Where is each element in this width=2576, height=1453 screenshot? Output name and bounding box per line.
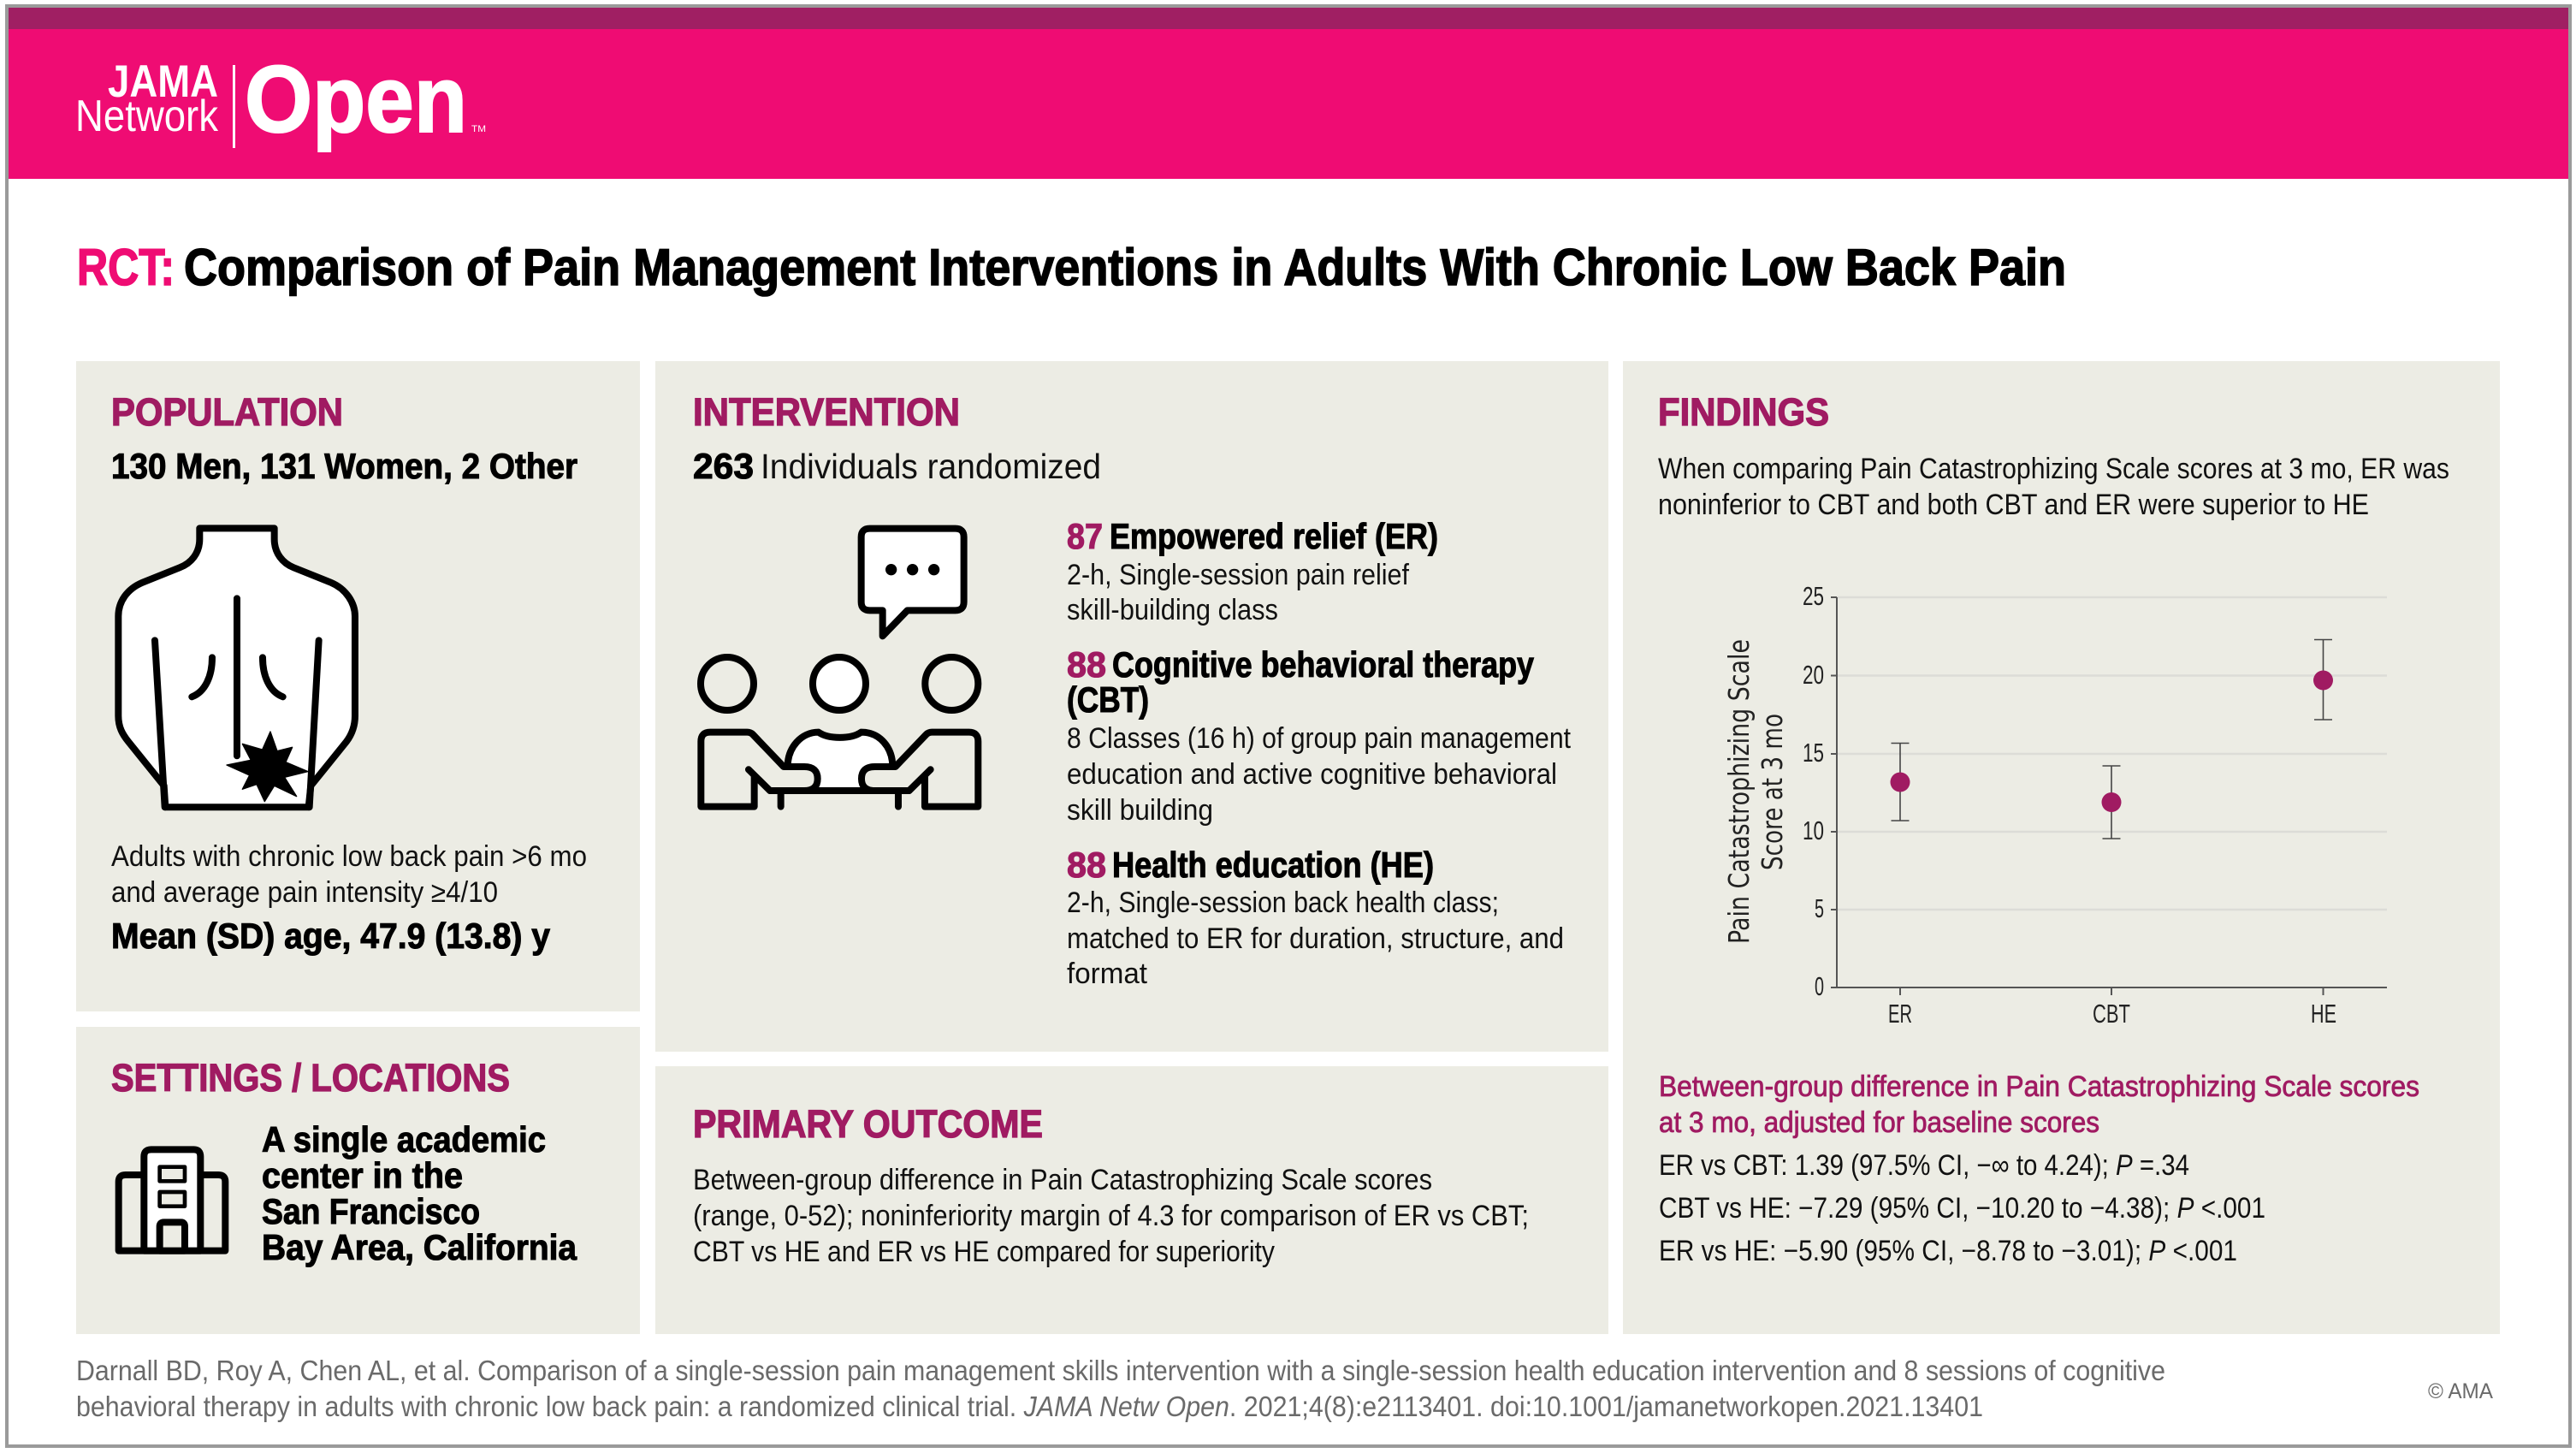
population description: Adults with chronic low back pain >6 mo — [111, 840, 587, 873]
arm: empowered relief: skill-building class — [1067, 594, 1278, 626]
findings summary — [1658, 453, 2449, 521]
panel: settings and locations — [76, 1027, 640, 1334]
between-group difference heading — [1659, 1070, 2419, 1139]
x axis labels: CBT — [2093, 999, 2130, 1029]
logo: JAMA Network Open: JAMA — [108, 56, 218, 107]
arm: cognitive behavioral therapy — [1067, 644, 1571, 827]
y axis labels: 15 — [1803, 738, 1824, 768]
between-group results: CBT vs HE: −7.29 (95% CI, −10.20 to −4.38); P <.001 — [1659, 1192, 2265, 1225]
population description — [111, 840, 587, 909]
chart: pain catastrophizing score by group — [1722, 581, 2387, 1029]
arm: health education: 88 — [1067, 845, 1106, 885]
heading: intervention: INTERVENTION — [693, 390, 960, 434]
y axis title: Pain Catastrophizing Scale — [1722, 639, 1756, 944]
location text: A single academic — [262, 1119, 546, 1159]
icon: back with lower back pain — [118, 528, 355, 807]
arm: health education: Health education (HE) — [1112, 845, 1434, 885]
heading: settings: SETTINGS / LOCATIONS — [111, 1056, 510, 1100]
location text: Bay Area, California — [262, 1227, 577, 1267]
population description: and average pain intensity ≥4/10 — [111, 876, 498, 909]
y axis labels: 5 — [1815, 893, 1824, 923]
y axis labels: 25 — [1803, 581, 1824, 611]
location text: center in the — [262, 1155, 463, 1195]
between-group results: ER vs CBT: 1.39 (97.5% CI, −∞ to 4.24); P =.34 — [1659, 1149, 2189, 1182]
findings summary: noninferior to CBT and both CBT and ER were superior to HE — [1658, 489, 2369, 521]
x axis labels: HE — [2311, 999, 2336, 1029]
panel: primary outcome — [655, 1066, 1608, 1334]
between-group results — [1659, 1149, 2265, 1267]
y axis labels: 10 — [1803, 815, 1824, 845]
findings summary: When comparing Pain Catastrophizing Scale scores at 3 mo, ER was — [1658, 453, 2449, 485]
citation — [76, 1355, 2165, 1422]
title: RCT: — [77, 239, 175, 296]
mean age: Mean (SD) age, 47.9 (13.8) y — [111, 916, 551, 956]
arm: health education: 2-h, Single-session back health class; — [1067, 887, 1499, 919]
x axis labels: ER — [1888, 999, 1912, 1029]
outcome description: CBT vs HE and ER vs HE compared for superiority — [693, 1236, 1275, 1268]
header band — [9, 8, 2568, 179]
y axis title: Score at 3 mo — [1756, 714, 1789, 870]
between-group difference heading: Between-group difference in Pain Catastrophizing Scale scores — [1659, 1070, 2419, 1103]
between-group difference heading: at 3 mo, adjusted for baseline scores — [1659, 1106, 2099, 1139]
arm: cognitive behavioral therapy: 8 Classes (16 h) of group pain management — [1067, 722, 1571, 755]
arm: empowered relief — [1067, 516, 1438, 626]
panel: population — [76, 361, 640, 1011]
location text — [262, 1119, 577, 1267]
arm: cognitive behavioral therapy: 88 — [1067, 644, 1106, 685]
arm: cognitive behavioral therapy: education and active cognitive behavioral — [1067, 758, 1557, 791]
arm: empowered relief: Empowered relief (ER) — [1110, 516, 1438, 556]
x axis labels — [1888, 999, 2336, 1029]
logo: JAMA Network Open — [75, 47, 486, 152]
arm: health education — [1067, 845, 1564, 990]
citation: behavioral therapy in adults with chronic low back pain: a randomized clinical trial. JAMA Netw Open. 2021;4(8):e2113401. doi:10.1001/jamanetworkopen.2021.13401 — [76, 1391, 1983, 1422]
citation: Darnall BD, Roy A, Chen AL, et al. Comparison of a single-session pain management skills intervention with a single-session health education intervention and 8 sessions of cognitive — [76, 1355, 2165, 1386]
between-group results: ER vs HE: −5.90 (95% CI, −8.78 to −3.01); P <.001 — [1659, 1235, 2237, 1267]
copyright: © AMA — [2428, 1379, 2493, 1403]
data points with error bars — [1891, 640, 2333, 839]
outcome description: (range, 0-52); noninferiority margin of 4.3 for comparison of ER vs CBT; — [693, 1200, 1529, 1232]
participant counts: 130 Men, 131 Women, 2 Other — [111, 446, 577, 486]
heading: primary outcome: PRIMARY OUTCOME — [693, 1102, 1043, 1146]
arm: health education: format — [1067, 958, 1148, 990]
arm: cognitive behavioral therapy: (CBT) — [1067, 679, 1149, 720]
arm: cognitive behavioral therapy: Cognitive behavioral therapy — [1112, 644, 1535, 685]
logo: JAMA Network Open: Open — [245, 47, 467, 152]
outcome description: Between-group difference in Pain Catastrophizing Scale scores — [693, 1164, 1432, 1196]
logo: JAMA Network Open: TM — [471, 124, 486, 134]
y axis labels: 20 — [1803, 660, 1824, 690]
randomized count: 263 — [693, 446, 754, 486]
y axis labels: 0 — [1815, 971, 1824, 1001]
heading: findings: FINDINGS — [1658, 390, 1829, 434]
y axis title — [1722, 639, 1789, 944]
arm: empowered relief: 2-h, Single-session pain relief — [1067, 559, 1409, 591]
logo: JAMA Network Open: Network — [75, 92, 219, 141]
arm: cognitive behavioral therapy: skill building — [1067, 794, 1213, 827]
panel: intervention — [655, 361, 1608, 1052]
location text: San Francisco — [262, 1191, 480, 1231]
icon: building — [119, 1149, 225, 1251]
y axis labels — [1803, 581, 1824, 1001]
arm: empowered relief: 87 — [1067, 516, 1103, 556]
randomized count: Individuals randomized — [761, 447, 1101, 486]
outcome description — [693, 1164, 1529, 1268]
arm: health education: matched to ER for duration, structure, and — [1067, 922, 1564, 955]
title: Comparison of Pain Management Interventions in Adults With Chronic Low Back Pain — [184, 239, 2066, 296]
icon: group discussion — [701, 529, 978, 807]
heading: population: POPULATION — [111, 390, 343, 434]
panel: findings — [1623, 361, 2500, 1334]
